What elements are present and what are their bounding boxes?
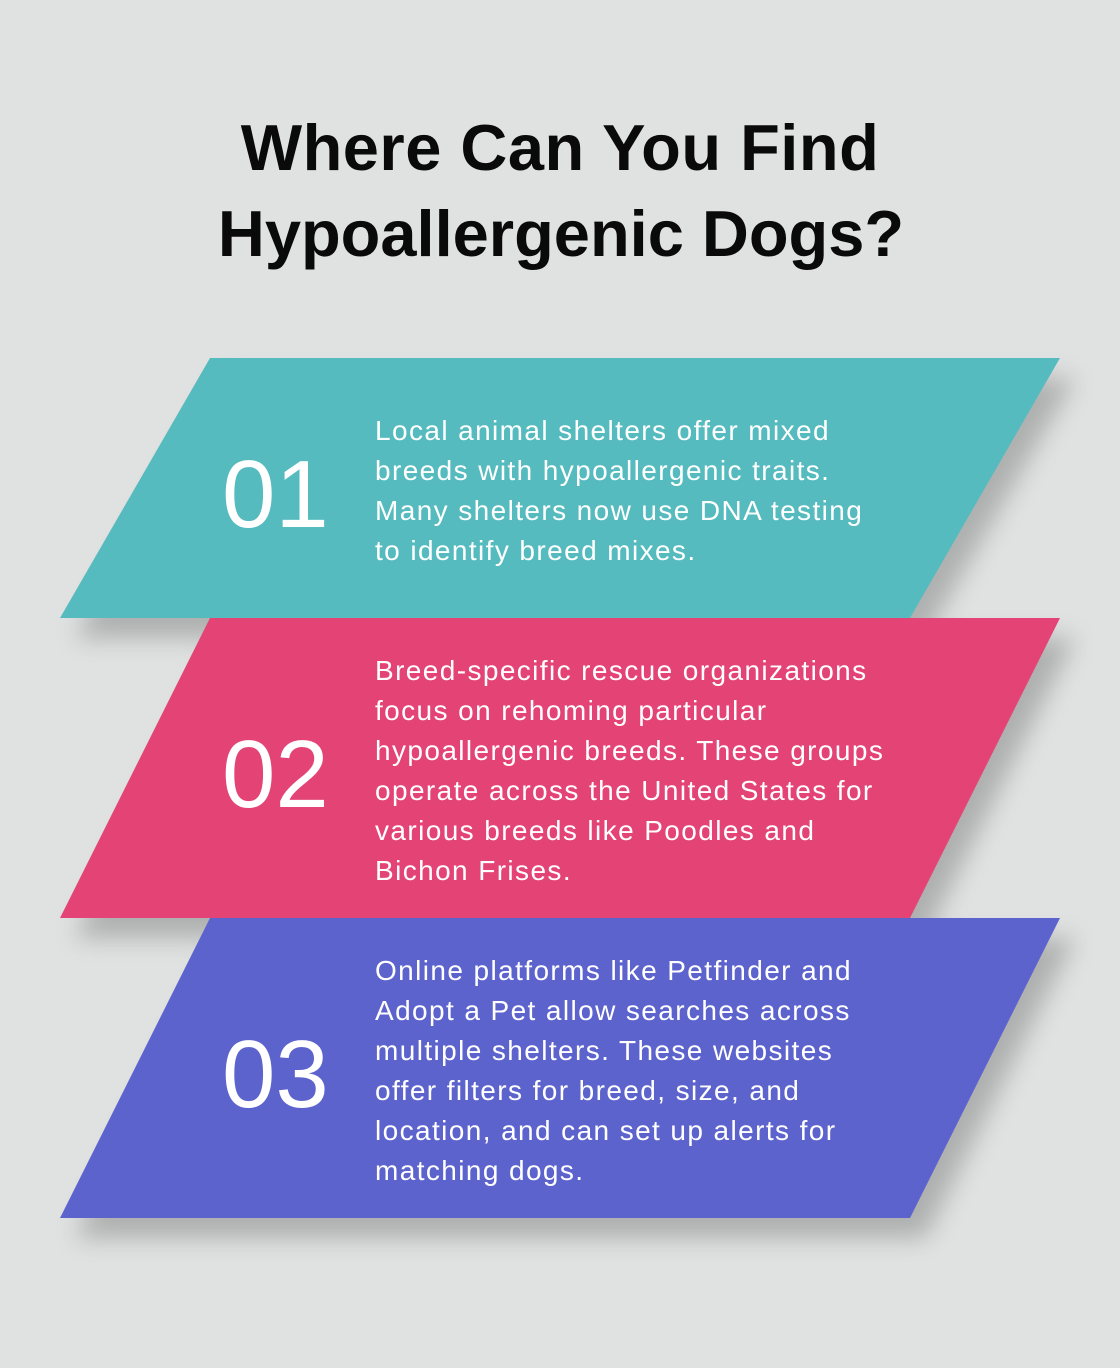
panel: 01 shelters: [60, 358, 1060, 618]
title: [218, 111, 904, 270]
text 01: [375, 415, 863, 566]
text 03: [375, 955, 852, 1186]
number 03: 03: [222, 1021, 329, 1128]
text 03: location, and can set up alerts for: [375, 1115, 836, 1146]
text 03: multiple shelters. These websites: [375, 1035, 833, 1066]
title: Where Can You Find: [241, 111, 879, 184]
text 01: Local animal shelters offer mixed: [375, 415, 830, 446]
panel: 03 online platforms: [60, 918, 1060, 1218]
text 02: [375, 655, 884, 886]
text 02: focus on rehoming particular: [375, 695, 768, 726]
title: Hypoallergenic Dogs?: [218, 197, 904, 270]
text 01: Many shelters now use DNA testing: [375, 495, 863, 526]
panel shadows: [75, 378, 1075, 1238]
text 02: operate across the United States for: [375, 775, 874, 806]
text 01: to identify breed mixes.: [375, 535, 697, 566]
text 03: Adopt a Pet allow searches across: [375, 995, 851, 1026]
text 02: Breed-specific rescue organizations: [375, 655, 868, 686]
text 02: hypoallergenic breeds. These groups: [375, 735, 884, 766]
number 02: 02: [222, 721, 329, 828]
number 01: 01: [222, 441, 329, 548]
panel: 02 rescue organizations: [60, 618, 1060, 918]
text 03: Online platforms like Petfinder and: [375, 955, 852, 986]
text 03: offer filters for breed, size, and: [375, 1075, 800, 1106]
text 02: various breeds like Poodles and: [375, 815, 815, 846]
text 01: breeds with hypoallergenic traits.: [375, 455, 830, 486]
text 03: matching dogs.: [375, 1155, 584, 1186]
text 02: Bichon Frises.: [375, 855, 572, 886]
